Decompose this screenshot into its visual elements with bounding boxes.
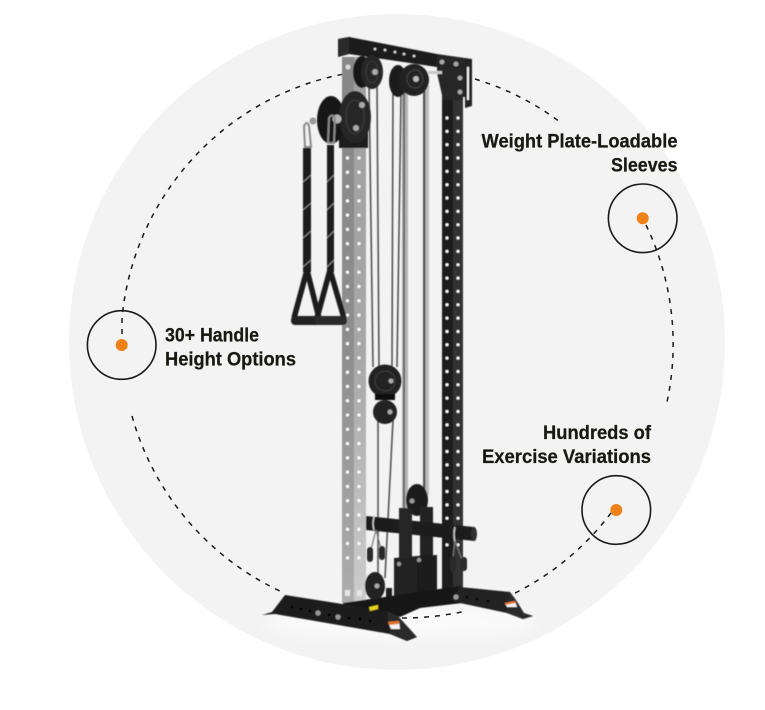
upper pulley one xyxy=(353,55,383,89)
marker: exercise variations xyxy=(582,476,651,544)
upper pulley two xyxy=(389,64,429,97)
callout: weight plate-loadable sleeves xyxy=(482,130,678,253)
marker: sleeves xyxy=(608,184,677,253)
label: handle height: 30+ Handle xyxy=(165,324,259,346)
label: sleeves: Weight Plate-Loadable xyxy=(482,130,678,152)
guide rods xyxy=(402,85,429,510)
floor glow xyxy=(265,606,535,638)
cable handle straps and carabiners xyxy=(291,116,347,325)
label: sleeves: Sleeves xyxy=(611,154,678,176)
label: exercise variations: Exercise Variations xyxy=(482,446,651,468)
base frame xyxy=(262,586,533,641)
callout: 30+ handle height options xyxy=(87,311,296,379)
black upright post xyxy=(442,75,463,589)
lower pulley xyxy=(365,572,392,600)
marker: handle height xyxy=(87,311,156,379)
carriage pulleys xyxy=(310,91,371,148)
label: sleeves xyxy=(482,130,678,176)
callout: hundreds of exercise variations xyxy=(482,422,651,544)
dashed orbit connecting callouts xyxy=(122,74,673,618)
silver upright post xyxy=(342,57,366,603)
gym cable tower xyxy=(262,37,533,641)
cables xyxy=(369,85,401,578)
top beam and bracket xyxy=(338,37,472,108)
label: exercise variations xyxy=(482,422,651,468)
plate loading assembly xyxy=(366,484,477,598)
hanging stirrup handles xyxy=(367,530,467,572)
label: handle height xyxy=(165,324,296,370)
floating pulley pair xyxy=(368,364,402,424)
label: exercise variations: Hundreds of xyxy=(543,422,651,444)
background circle xyxy=(69,14,725,670)
label: handle height: Height Options xyxy=(165,348,296,370)
